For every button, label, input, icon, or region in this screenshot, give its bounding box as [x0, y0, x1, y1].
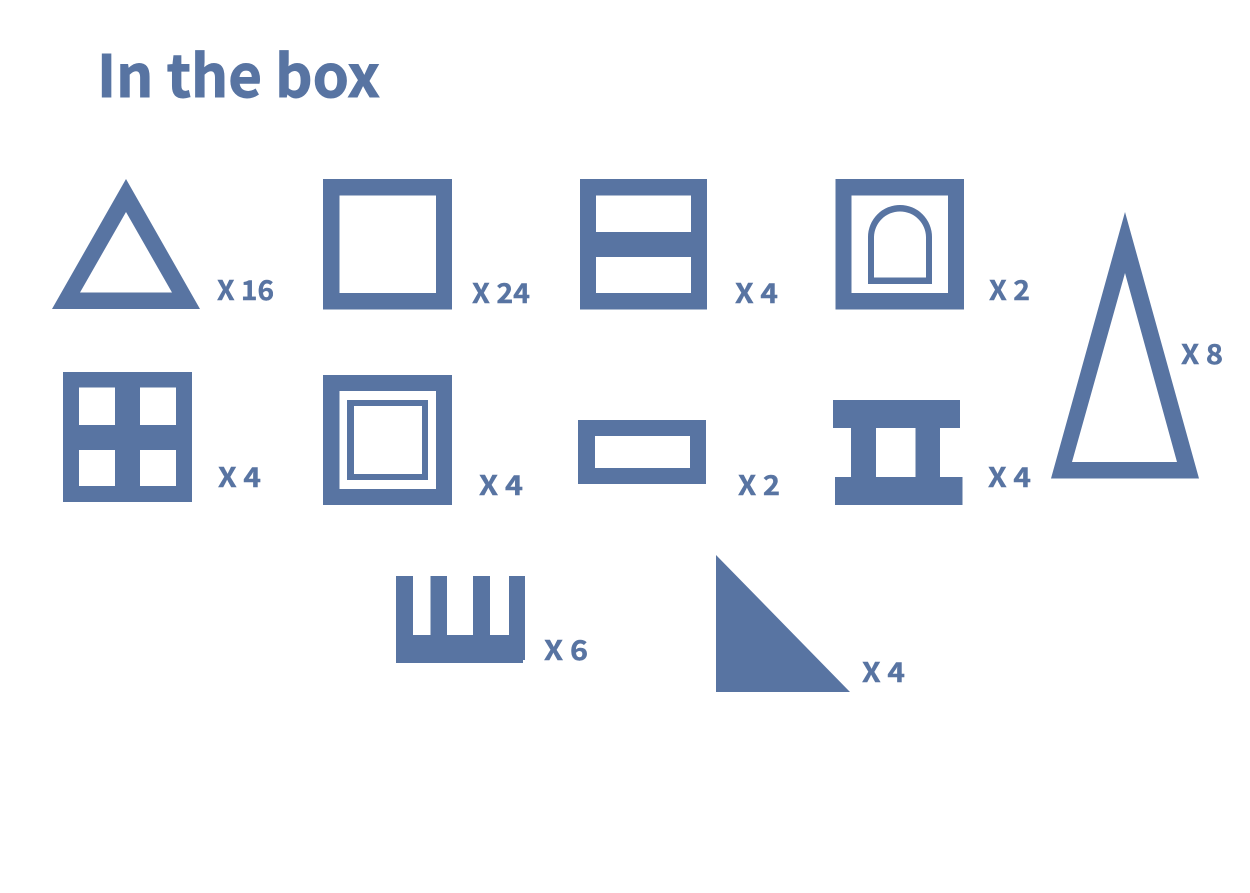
piece: four-pane window x4: [63, 372, 261, 502]
piece: tall triangle x8: [1051, 212, 1223, 478]
piece: triangle x16: X 16: [217, 269, 274, 308]
piece: comb shape x6: [396, 576, 588, 668]
piece: frame with horizontal bar x4: [580, 179, 778, 311]
piece: double-bar column shape x4: [833, 400, 1031, 505]
piece: wide rectangle frame x2: X 2: [738, 464, 780, 503]
piece: solid right triangle x4: X 4: [862, 651, 905, 690]
piece: tall triangle x8: X 8: [1181, 333, 1223, 372]
piece: square frame x24: X 24: [472, 272, 530, 311]
piece: wide rectangle frame x2: [578, 420, 780, 503]
piece: square frame x24: [323, 179, 530, 311]
piece: comb shape x6: X 6: [544, 629, 588, 668]
piece: double-bar column shape x4: X 4: [988, 456, 1031, 495]
piece: nested square x4: X 4: [479, 464, 523, 503]
title: In the box: [97, 30, 380, 114]
piece: four-pane window x4: X 4: [218, 456, 261, 495]
piece: triangle x16: [52, 179, 274, 309]
piece: solid right triangle x4: [716, 555, 905, 692]
piece: frame with arched door x2: X 2: [989, 269, 1030, 308]
piece: frame with horizontal bar x4: X 4: [735, 272, 778, 311]
piece: frame with arched door x2: [836, 179, 1030, 310]
piece: nested square x4: [323, 375, 523, 505]
